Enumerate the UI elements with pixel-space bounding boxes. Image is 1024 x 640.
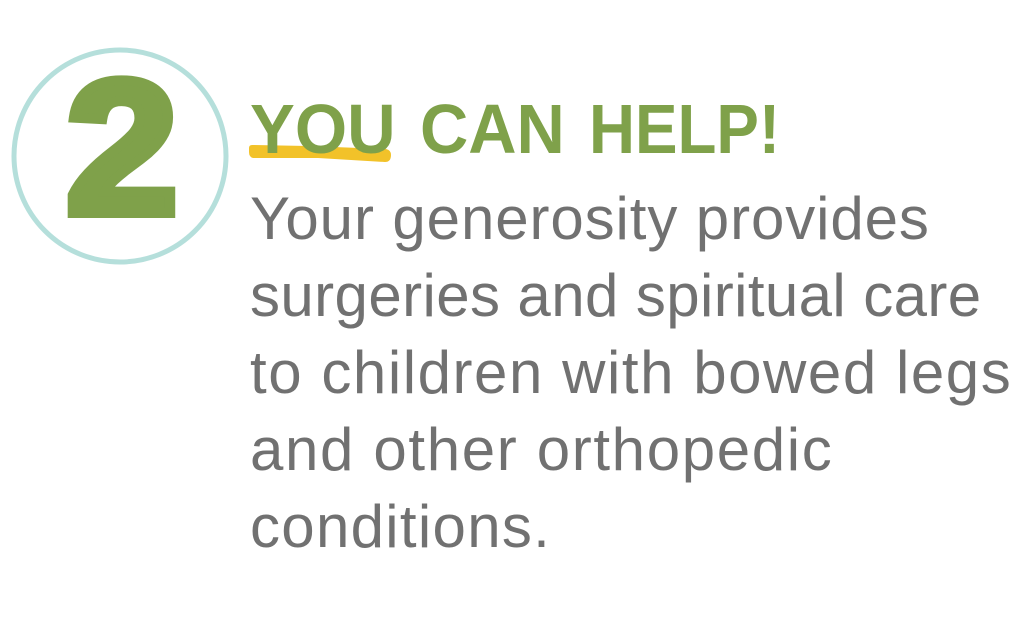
body text: to children with bowed legs [250, 339, 1012, 406]
body text: surgeries and spiritual care [250, 262, 982, 329]
heading text: CAN [420, 90, 565, 168]
heading [249, 90, 780, 168]
number badge [12, 42, 228, 264]
body text [250, 185, 1012, 560]
body text: conditions. [250, 493, 551, 560]
highlight underline [249, 145, 391, 162]
body text: Your generosity provides [250, 185, 930, 252]
heading text: YOU [250, 90, 396, 168]
heading text [250, 90, 780, 168]
heading text: HELP! [589, 90, 780, 168]
number badge: 2 [66, 42, 178, 254]
body text: and other orthopedic [250, 416, 833, 483]
